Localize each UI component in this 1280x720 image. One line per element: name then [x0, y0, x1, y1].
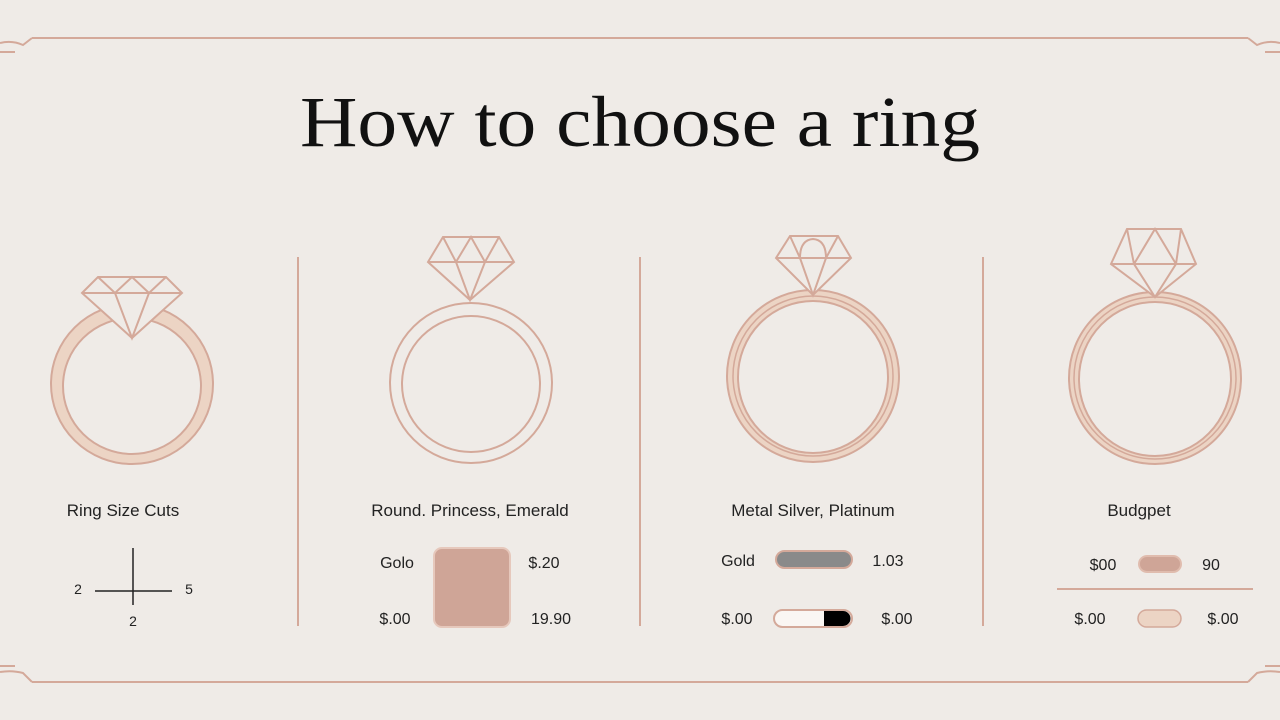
- chart: cut swatch: $.20: [528, 555, 560, 572]
- chart: cut swatch: 19.90: [531, 611, 571, 628]
- chart: budget bars: $00: [1090, 557, 1116, 574]
- icon: ring 4: [1069, 229, 1241, 464]
- chart: cut swatch: $.00: [379, 611, 411, 628]
- chart: metal bars: $.00: [721, 611, 753, 628]
- chart: cut swatch: [379, 548, 571, 628]
- label: metal: Metal Silver, Platinum: [731, 501, 895, 520]
- chart: size cross: 2: [129, 613, 137, 629]
- chart: metal bars: Gold: [721, 553, 755, 570]
- panel: metal: [721, 236, 913, 628]
- dividers: [298, 257, 983, 626]
- chart: budget bars: [1057, 556, 1253, 628]
- label: budget: Budgpet: [1107, 501, 1171, 520]
- title: How to choose a ring: [300, 82, 980, 162]
- chart: cut swatch: Golo: [380, 555, 414, 572]
- icon: ring 1: [51, 277, 213, 464]
- panel: cuts: [371, 237, 571, 628]
- panel: ring size: [51, 277, 213, 629]
- chart: budget bars: $.00: [1074, 611, 1106, 628]
- icon: ring 3: [727, 236, 899, 462]
- chart: budget bars: $.00: [1207, 611, 1239, 628]
- chart: budget bars: 90: [1202, 557, 1220, 574]
- label: cuts: Round. Princess, Emerald: [371, 501, 569, 520]
- chart: metal bars: 1.03: [872, 553, 904, 570]
- chart: size cross: 5: [185, 581, 193, 597]
- chart: size cross: 2: [74, 581, 82, 597]
- icon: ring 2: [390, 237, 552, 463]
- panel: budget: [1057, 229, 1253, 628]
- chart: metal bars: [721, 551, 913, 628]
- label: Ring Size Cuts: Ring Size Cuts: [67, 501, 179, 520]
- chart: metal bars: $.00: [881, 611, 913, 628]
- chart: size cross: [74, 548, 193, 629]
